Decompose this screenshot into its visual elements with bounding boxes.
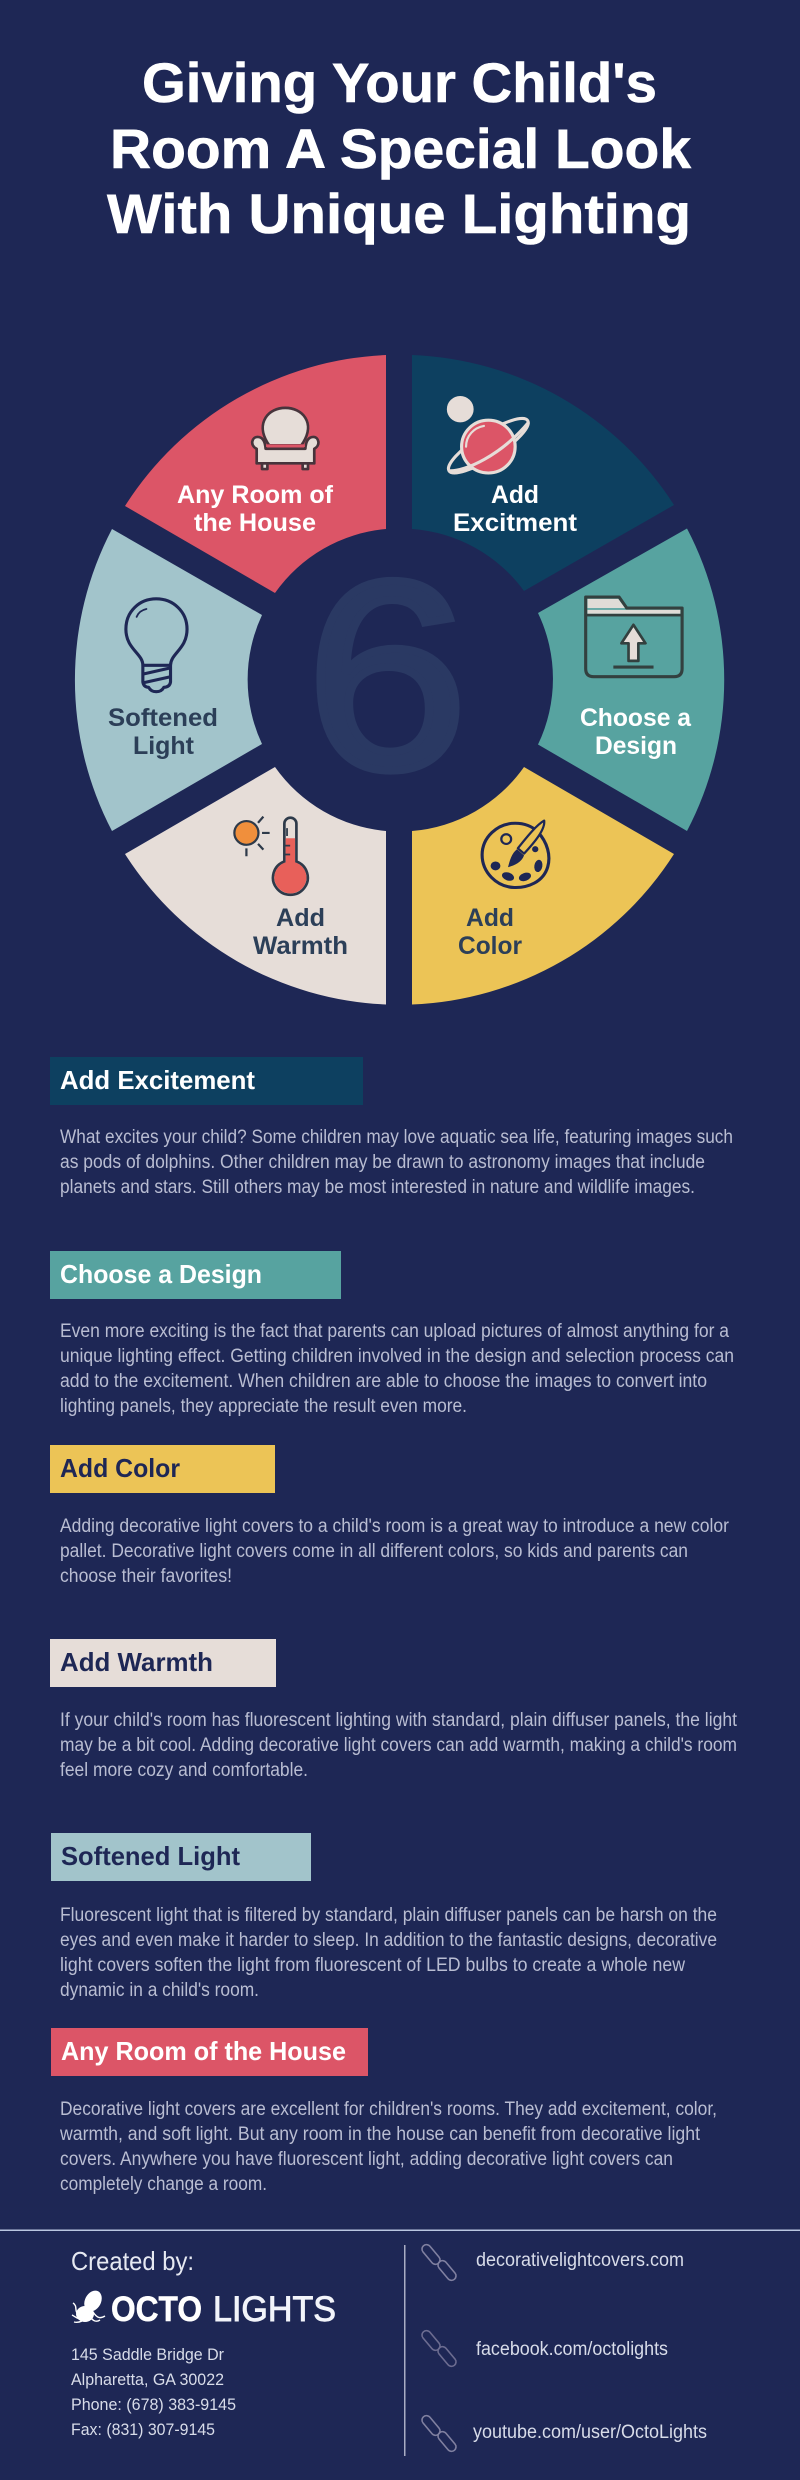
logo: octo lights: OCTO xyxy=(111,2290,202,2329)
label: add warmth: Warmth xyxy=(253,932,348,960)
text: add excitement: What excites your child? Some children may love aquatic sea life, featuring images such xyxy=(60,1127,733,1148)
label: softened light: Light xyxy=(133,732,195,760)
text: add color: pallet. Decorative light covers come in all different colors, so kids and parents can xyxy=(60,1541,688,1562)
section: any room of the house xyxy=(51,2028,717,2195)
text: add excitement: as pods of dolphins. Other children may be drawn to astronomy images that include xyxy=(60,1152,705,1173)
text: add excitement xyxy=(60,1127,733,1198)
text: softened light: eyes and even make it harder to sleep. In addition to the fantastic designs, decorative xyxy=(60,1930,717,1951)
text: softened light: Fluorescent light that is filtered by standard, plain diffuser panels can be harsh on the xyxy=(60,1905,717,1926)
label: any room of the house xyxy=(177,481,334,537)
section: add warmth xyxy=(50,1639,738,1781)
heading: softened light xyxy=(51,1833,311,1881)
segment: choose a design xyxy=(538,528,724,831)
link: youtube xyxy=(420,2414,707,2453)
text: address and phone: Fax: (831) 307-9145 xyxy=(71,2420,215,2439)
segment: add excitement xyxy=(412,355,674,591)
text: add color: choose their favorites! xyxy=(60,1566,232,1587)
text: add color: Adding decorative light covers to a child's room is a great way to introduce a new color xyxy=(60,1516,730,1537)
link: website xyxy=(420,2243,684,2282)
heading: any room of the house xyxy=(51,2028,368,2076)
text: created by: Created by: xyxy=(71,2246,194,2276)
text: choose a design xyxy=(60,1321,734,1417)
section: softened light xyxy=(51,1833,717,2001)
label: add excitment: Excitment xyxy=(453,509,578,537)
icon: light bulb xyxy=(126,599,187,692)
label: add excitment xyxy=(453,481,578,537)
link: website: decorativelightcovers.com xyxy=(476,2250,684,2271)
heading: add color xyxy=(50,1445,275,1493)
heading: add excitement: Add Excitement xyxy=(60,1065,255,1095)
heading: choose a design: Choose a Design xyxy=(60,1259,262,1289)
text: address and phone xyxy=(71,2345,236,2439)
logo: octo lights: LIGHTS xyxy=(213,2290,336,2329)
text: add warmth: feel more cozy and comfortable. xyxy=(60,1760,308,1781)
heading: add warmth xyxy=(50,1639,276,1687)
icon: octopus xyxy=(72,2288,105,2322)
title: With Unique Lighting xyxy=(107,182,691,245)
title xyxy=(107,51,692,245)
link: facebook: facebook.com/octolights xyxy=(476,2339,668,2360)
heading: add color: Add Color xyxy=(60,1453,180,1483)
label: add color xyxy=(458,904,522,960)
icon: sun and thermometer xyxy=(234,817,308,895)
text: any room of the house: covers. Anywhere you have fluorescent light, adding decorative light covers can xyxy=(60,2149,673,2170)
label: softened light: Softened xyxy=(108,704,218,732)
segment: softened light xyxy=(75,529,262,831)
text: add color xyxy=(60,1516,730,1587)
link: facebook xyxy=(420,2329,668,2368)
label: any room of the house: the House xyxy=(194,509,316,537)
text: any room of the house: warmth, and soft light. But any room in the house can benefit from decorative light xyxy=(59,2124,701,2145)
text: any room of the house: Decorative light covers are excellent for children's rooms. They add excitement, color, xyxy=(60,2099,717,2120)
title: Giving Your Child's xyxy=(142,51,657,114)
label: add warmth: Add xyxy=(276,904,325,932)
logo: octo lights xyxy=(72,2288,336,2329)
label: add warmth xyxy=(253,904,348,960)
section: add color xyxy=(50,1445,730,1587)
text: choose a design: unique lighting effect. Getting children involved in the design and selection process can xyxy=(60,1346,734,1367)
footer: creator details xyxy=(71,2246,336,2439)
link: youtube: youtube.com/user/OctoLights xyxy=(473,2422,707,2443)
heading: add warmth: Add Warmth xyxy=(60,1647,213,1677)
icon: planet and moon xyxy=(442,396,534,481)
text: choose a design: add to the excitement. When children are able to choose the images to convert into xyxy=(60,1371,707,1392)
section: add excitement xyxy=(50,1057,733,1198)
text: add warmth: may be a bit cool. Adding decorative light covers can add warmth, making a child's room xyxy=(60,1735,737,1756)
icon: paint palette xyxy=(482,821,549,888)
label: add color: Add xyxy=(466,904,514,932)
big number six: 6 xyxy=(306,525,468,825)
label: add color: Color xyxy=(458,932,522,960)
segment: add warmth xyxy=(125,767,386,1004)
heading: choose a design xyxy=(50,1251,341,1299)
label: choose a design: Choose a xyxy=(580,704,692,732)
icon: folder with upload arrow xyxy=(586,597,682,677)
label: choose a design xyxy=(580,704,692,760)
heading: softened light: Softened Light xyxy=(61,1841,240,1871)
text: address and phone: 145 Saddle Bridge Dr xyxy=(71,2345,224,2364)
label: choose a design: Design xyxy=(595,732,677,760)
text: add excitement: planets and stars. Still others may be most interested in nature and wildlife images. xyxy=(60,1177,695,1198)
icon: armchair xyxy=(252,408,318,469)
footer: links xyxy=(420,2243,707,2453)
text: softened light xyxy=(60,1905,717,2001)
text: add warmth xyxy=(60,1710,738,1781)
text: address and phone: Alpharetta, GA 30022 xyxy=(71,2370,224,2389)
wheel diagram xyxy=(75,355,724,1004)
text: add warmth: If your child's room has fluorescent lighting with standard, plain diffuser panels, the light xyxy=(60,1710,738,1731)
label: add excitment: Add xyxy=(491,481,539,509)
title: Room A Special Look xyxy=(110,117,692,180)
heading: any room of the house: Any Room of the House xyxy=(61,2036,346,2066)
text: choose a design: Even more exciting is the fact that parents can upload pictures of almost anything for a xyxy=(60,1321,729,1342)
text: choose a design: lighting panels, they appreciate the result even more. xyxy=(60,1396,467,1417)
section: choose a design xyxy=(50,1251,734,1417)
label: any room of the house: Any Room of xyxy=(177,481,334,509)
segment: any room of the house xyxy=(125,355,386,593)
text: softened light: light covers soften the light from fluorescent of LED bulbs to create a whole new xyxy=(60,1955,685,1976)
label: softened light xyxy=(108,704,218,760)
heading: add excitement xyxy=(50,1057,363,1105)
text: address and phone: Phone: (678) 383-9145 xyxy=(71,2395,236,2414)
text: any room of the house xyxy=(59,2099,717,2195)
segment: add color xyxy=(412,767,674,1004)
text: any room of the house: completely change a room. xyxy=(60,2174,267,2195)
text: softened light: dynamic in a child's room. xyxy=(60,1980,259,2001)
